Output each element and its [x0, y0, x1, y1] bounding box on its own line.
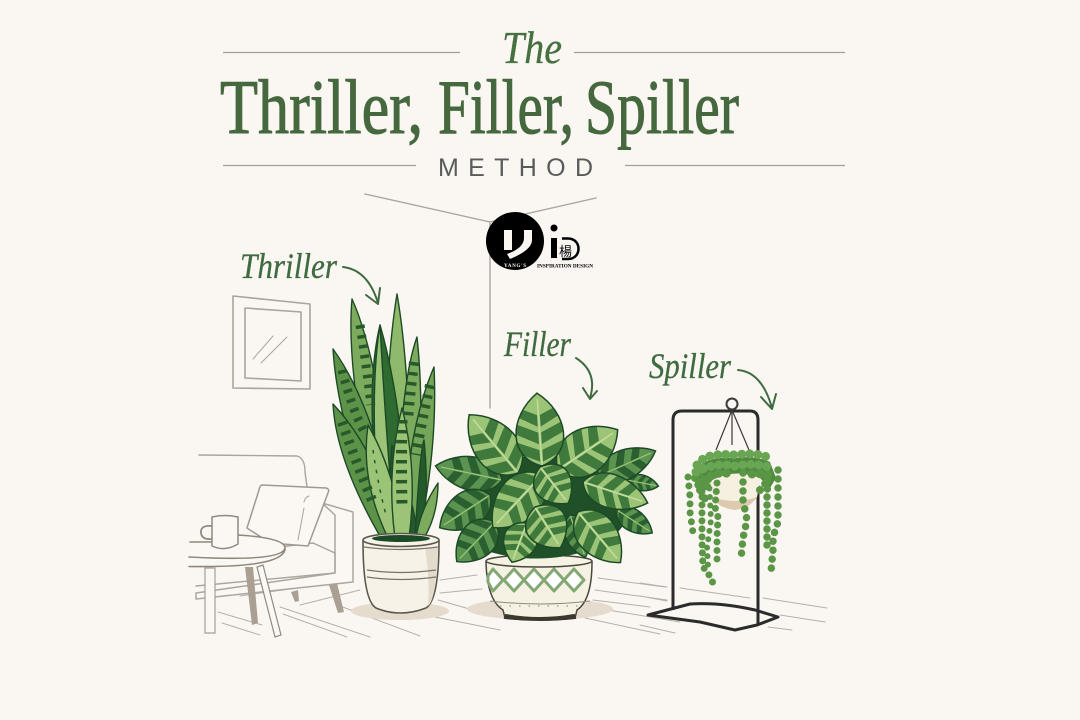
heading: Thriller, Filler, Spiller: Filler,	[438, 64, 574, 150]
chair arm	[196, 503, 353, 599]
title	[220, 22, 845, 182]
armchair	[196, 455, 353, 613]
heading: Thriller, Filler, Spiller	[220, 64, 739, 150]
logo	[486, 212, 593, 270]
cushion	[247, 485, 329, 546]
patterned pot	[486, 555, 592, 620]
logo: YANG'S	[504, 264, 526, 269]
logo: 楊	[559, 241, 572, 260]
table legs	[205, 568, 215, 633]
mug	[212, 516, 238, 549]
heading: Thriller, Filler, Spiller: Spiller	[585, 64, 739, 150]
string of pearls	[688, 454, 778, 583]
label: Thriller: Thriller	[240, 246, 338, 286]
foliage mass	[468, 455, 632, 559]
prayer plant leaves	[426, 391, 664, 581]
heading: Method: METHOD	[438, 154, 593, 182]
heading: The: The	[502, 22, 562, 73]
thriller plant	[333, 294, 449, 620]
table top	[189, 535, 285, 567]
side table and mug	[189, 516, 285, 637]
black metal stand	[648, 411, 778, 630]
white pot	[363, 541, 439, 613]
title rules	[223, 52, 845, 166]
label: Filler: Filler	[503, 324, 572, 364]
pot shadow	[467, 598, 613, 620]
heading: Thriller, Filler, Spiller: Thriller,	[220, 64, 423, 150]
room wall lines	[365, 194, 596, 408]
hanging ring and cords	[716, 398, 749, 450]
snake plant leaves	[333, 294, 438, 538]
chair back	[199, 455, 307, 487]
arrow: Spiller	[738, 370, 776, 409]
pot shadow	[351, 602, 449, 620]
leaf bands	[342, 325, 430, 515]
filler plant	[426, 391, 664, 620]
spiller plant	[648, 398, 778, 630]
logo: INSPIRATION DESIGN	[537, 264, 593, 270]
floor lines	[218, 575, 827, 637]
hanging pot	[708, 472, 762, 510]
picture frame	[233, 296, 310, 389]
arrow: Filler	[576, 358, 597, 399]
chair seat	[196, 543, 335, 586]
label: Spiller: Spiller	[649, 346, 732, 386]
arrow: Thriller	[343, 267, 380, 304]
chair legs	[291, 583, 344, 613]
